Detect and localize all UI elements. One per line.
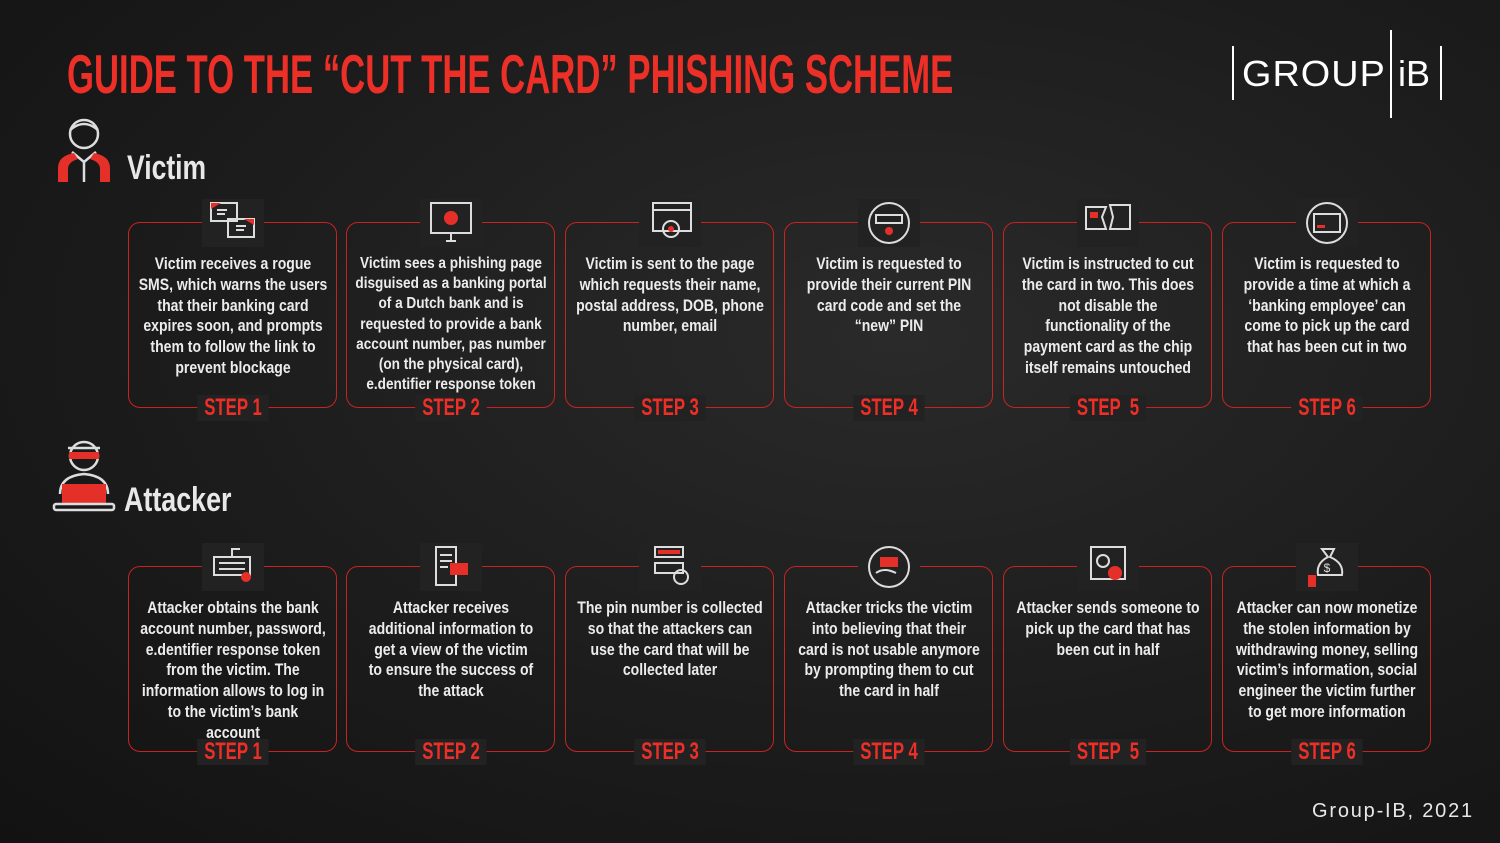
panel: attacker step 2: STEP 2 <box>422 738 479 765</box>
panel: attacker step 4: card is not usable anymore <box>798 641 979 659</box>
panel: attacker step 4 <box>784 566 993 752</box>
panel: victim step 3: Victim is sent to the page <box>585 255 754 273</box>
panel: victim step 2: STEP 2 <box>422 394 479 421</box>
panel: attacker step 4: the card in half <box>839 682 938 700</box>
panel: victim step 5: not disable the <box>1058 297 1157 315</box>
footer credit: Group-IB, 2021 <box>1312 800 1474 822</box>
panel: attacker step 4: into believing that their <box>811 620 966 638</box>
panel: attacker step 5 <box>1003 566 1212 752</box>
panel: victim step 2: e.dentifier response token <box>366 376 535 393</box>
panel: victim step 3: which requests their name, <box>579 276 760 294</box>
panel: victim step 1: that their banking card <box>157 297 308 315</box>
panel: attacker step 4: by prompting them to cut <box>804 661 973 679</box>
icon: card circle <box>1296 199 1358 247</box>
panel: attacker step 3: The pin number is collected <box>577 599 762 617</box>
panel: victim step 1: expires soon, and prompts <box>143 317 322 335</box>
panel: victim step 4: card code and set the <box>816 297 961 315</box>
panel: victim step 2: Victim sees a phishing page <box>360 255 541 272</box>
panel: attacker step 3 <box>565 566 774 752</box>
panel: victim step 4: “new” PIN <box>854 317 923 335</box>
panel: attacker step 6: engineer the victim further <box>1238 682 1415 700</box>
panel: attacker step 4: Attacker tricks the victim <box>805 599 972 617</box>
panel: victim step 5: Victim is instructed to cut <box>1022 255 1193 273</box>
panel: attacker step 6: the stolen information by <box>1243 620 1410 638</box>
panel: attacker step 6: victim’s information, social <box>1236 661 1417 679</box>
panel: attacker step 1: account <box>206 724 259 742</box>
icon: keyboard <box>202 543 264 591</box>
icon: monitor bug <box>420 199 482 247</box>
panel: victim step 1: prevent blockage <box>175 359 290 377</box>
panel: attacker step 2: to ensure the success of <box>368 661 533 679</box>
panel: attacker step 5: been cut in half <box>1056 641 1159 659</box>
panel: victim step 1: Victim receives a rogue <box>154 255 311 273</box>
icon: pin <box>858 199 920 247</box>
panel: victim step 5: STEP 5 <box>1076 394 1139 421</box>
panel: attacker step 2: get a view of the victim <box>374 641 527 659</box>
panel: attacker step 6: withdrawing money, selling <box>1235 641 1418 659</box>
panel: victim step 2: requested to provide a bank <box>360 316 541 333</box>
panel: attacker step 3: use the card that will be <box>590 641 749 659</box>
victim heading <box>58 118 206 187</box>
icon: hand card <box>858 543 920 591</box>
logo <box>1232 30 1442 118</box>
panel: attacker step 2: the attack <box>418 682 483 700</box>
panel: attacker step 4: STEP 4 <box>860 738 917 765</box>
panel: victim step 5: functionality of the <box>1045 317 1170 335</box>
panel: victim step 1: them to follow the link to <box>150 338 315 356</box>
panel: attacker step 6 <box>1222 566 1431 752</box>
panel: victim step 6 <box>1222 222 1431 408</box>
panel: attacker step 5: pick up the card that has <box>1025 620 1190 638</box>
panel: victim step 4: provide their current PIN <box>806 276 971 294</box>
panel: victim step 5: the card in two. This does <box>1021 276 1194 294</box>
panel: attacker step 5: Attacker sends someone to <box>1016 599 1199 617</box>
icon: victim <box>58 118 110 182</box>
panel: attacker step 1: STEP 1 <box>204 738 261 765</box>
panel: attacker step 5: STEP 5 <box>1076 738 1139 765</box>
panel: victim step 2: of a Dutch bank and is <box>378 295 523 312</box>
panel: victim step 1: SMS, which warns the users <box>138 276 327 294</box>
panel: victim step 1 <box>128 222 337 408</box>
icon: money bag: $ <box>1323 561 1330 575</box>
panel: victim step 6: Victim is requested to <box>1254 255 1399 273</box>
panel: victim step 6: ‘banking employee’ can <box>1248 297 1405 315</box>
panel: victim step 1: STEP 1 <box>204 394 261 421</box>
panel: attacker step 1: Attacker obtains the bank <box>147 599 318 617</box>
panel: attacker step 1: from the victim. The <box>166 661 299 679</box>
victim heading: Victim <box>127 149 206 187</box>
panel: victim step 4: Victim is requested to <box>816 255 961 273</box>
icon: safe skull <box>1076 543 1138 591</box>
panel: attacker step 2 <box>346 566 555 752</box>
logo: iB <box>1398 53 1430 94</box>
logo: GROUP <box>1242 53 1386 94</box>
panel: victim step 3 <box>565 222 774 408</box>
panel: victim step 6: come to pick up the card <box>1244 317 1409 335</box>
attacker heading <box>52 440 232 519</box>
panel: attacker step 1 <box>128 566 337 752</box>
panel: victim step 2: account number, pas number <box>356 336 545 353</box>
panel: victim step 5: payment card as the chip <box>1023 338 1192 356</box>
attacker heading: Attacker <box>124 481 232 519</box>
icon: documents <box>420 543 482 591</box>
panel: attacker step 3: STEP 3 <box>641 738 698 765</box>
panel: attacker step 6: to get more information <box>1248 703 1405 721</box>
panel: victim step 6: that has been cut in two <box>1247 338 1406 356</box>
panel: victim step 5: itself remains untouched <box>1024 359 1190 377</box>
panel: victim step 6: provide a time at which a <box>1243 276 1410 294</box>
panel: attacker step 1: to the victim’s bank <box>167 703 298 721</box>
panel: attacker step 3: collected later <box>622 661 717 679</box>
panel: attacker step 2: Attacker receives <box>392 599 509 617</box>
panel: victim step 3: number, email <box>622 317 717 335</box>
panel: victim step 5 <box>1003 222 1212 408</box>
icon: cut card <box>1076 199 1138 247</box>
panel: attacker step 1: information allows to log in <box>141 682 324 700</box>
panel: attacker step 6: STEP 6 <box>1298 738 1355 765</box>
panel: attacker step 1: e.dentifier response token <box>145 641 320 659</box>
panel: attacker step 6: Attacker can now monetize <box>1236 599 1417 617</box>
panel: victim step 3: STEP 3 <box>641 394 698 421</box>
icon: sms <box>202 199 264 247</box>
panel: attacker step 1: account number, password, <box>140 620 325 638</box>
panel: victim step 3: postal address, DOB, phone <box>576 297 763 315</box>
panel: attacker step 3: so that the attackers can <box>587 620 752 638</box>
panel: attacker step 2: additional information to <box>368 620 533 638</box>
panel: victim step 4: STEP 4 <box>860 394 917 421</box>
icon: money bag <box>1296 543 1358 591</box>
panel: victim step 2: (on the physical card), <box>378 356 523 373</box>
icon: form <box>638 199 700 247</box>
panel: victim step 4 <box>784 222 993 408</box>
title: GUIDE TO THE “CUT THE CARD” PHISHING SCHEME <box>67 43 953 105</box>
panel: victim step 2: disguised as a banking portal <box>355 275 546 292</box>
panel: victim step 2 <box>346 222 555 408</box>
panel: victim step 6: STEP 6 <box>1298 394 1355 421</box>
icon: attacker <box>52 440 116 512</box>
icon: pin clock <box>638 543 700 591</box>
